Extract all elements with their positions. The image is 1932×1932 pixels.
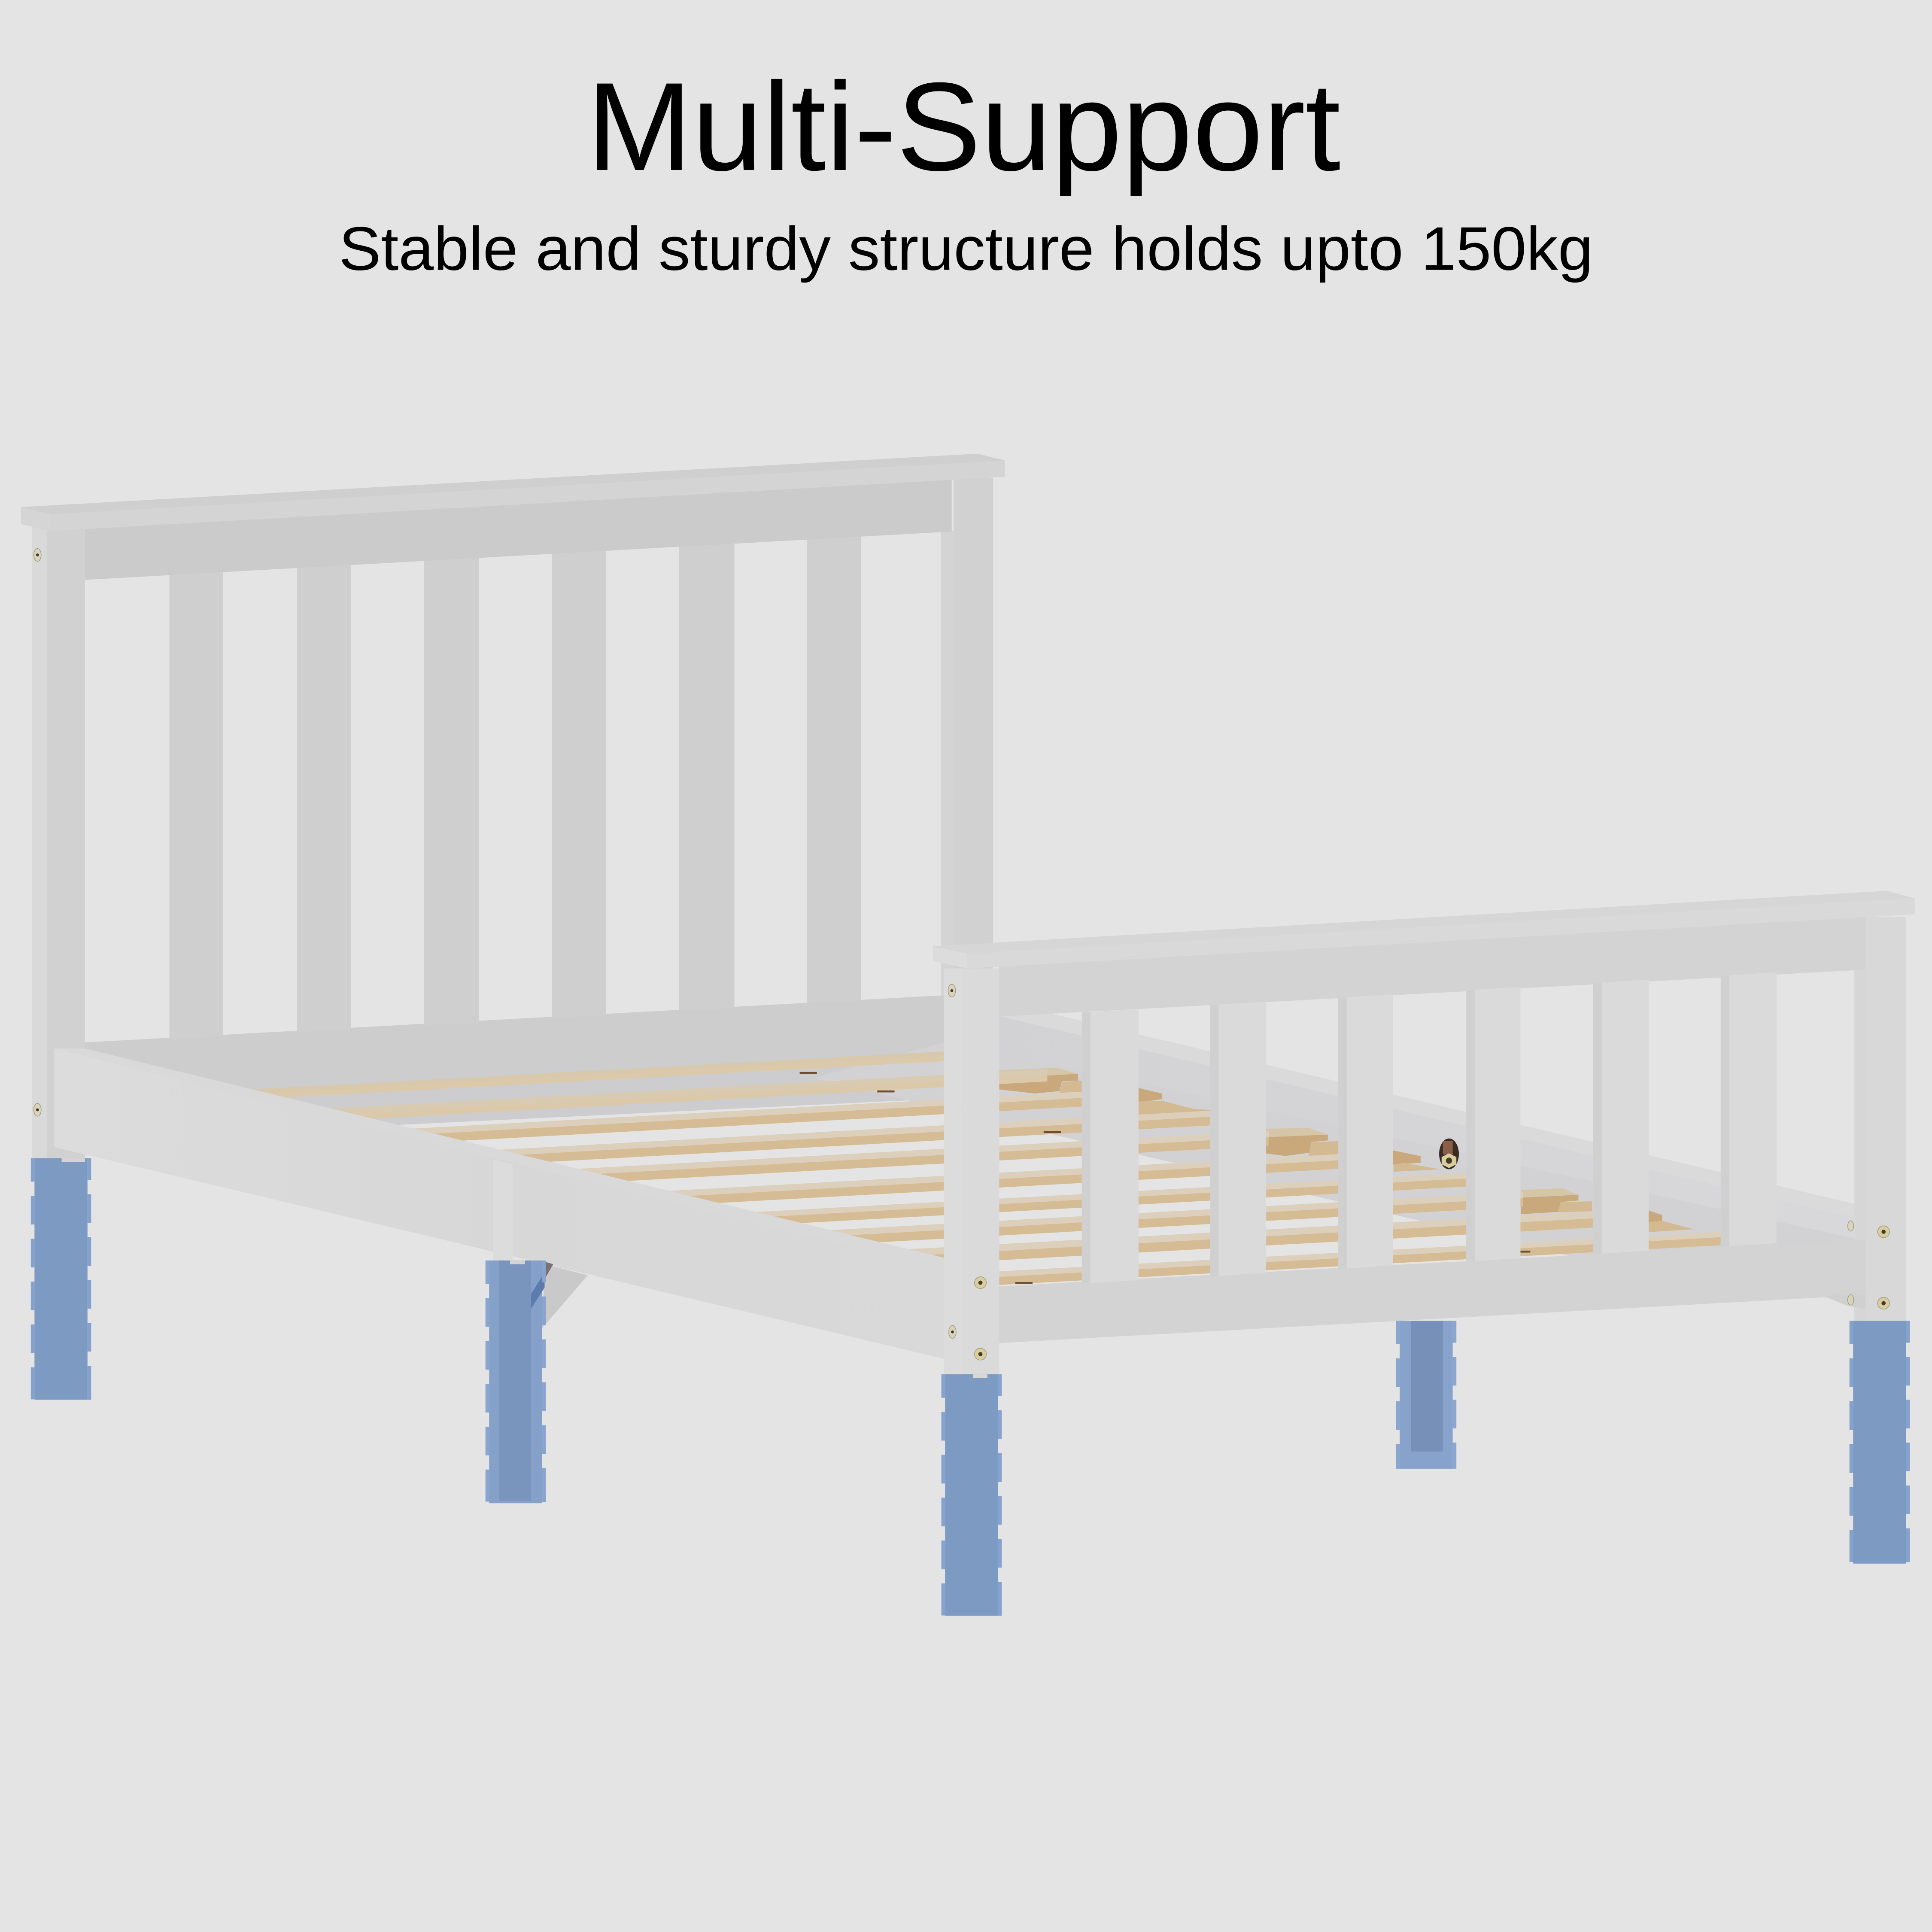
footboard vertical slats: [1082, 972, 1777, 1284]
leg: front left foot: [942, 1374, 1002, 1616]
far foot centre leg: [1396, 1321, 1456, 1469]
leg: centre near side: [486, 1261, 546, 1503]
slat 7: [721, 1173, 1475, 1227]
slat 8: [793, 1192, 1523, 1247]
headboard lower rail: [85, 996, 949, 1109]
slat 10: [960, 1232, 1721, 1287]
footboard left post: [944, 969, 999, 1375]
assembly screws: [34, 549, 1889, 1360]
slat 3: [386, 1089, 1129, 1145]
near side rail: [54, 1048, 945, 1359]
headboard: [21, 454, 1005, 1158]
bed illustration: [21, 454, 1915, 1616]
leg: back left: [31, 1158, 91, 1400]
headboard left post: [32, 522, 85, 1158]
leg: right foot: [1850, 1321, 1910, 1564]
headboard top rail: [85, 478, 952, 580]
subtitle: Stable and sturdy structure holds upto 150kg: [339, 215, 1593, 283]
foot slat 2: [1210, 1002, 1266, 1276]
footboard: [933, 891, 1915, 1375]
slat 2: [304, 1069, 1047, 1122]
foot slat 5: [1593, 980, 1649, 1255]
highlighted support legs: [31, 1158, 1910, 1616]
slat fixing marks: [800, 1072, 1530, 1284]
front screw heads: [975, 1226, 1889, 1360]
foot slat 3: [1338, 994, 1393, 1269]
slat cleats: [998, 1068, 1694, 1232]
side screw heads: [34, 549, 1853, 1338]
footboard right post: [1854, 917, 1906, 1322]
slat 4: [471, 1109, 1235, 1166]
foot slat 1: [1082, 1009, 1139, 1284]
title: Multi-Support: [586, 57, 1341, 197]
headboard right post: [941, 478, 993, 1048]
screw sockets: [36, 553, 1886, 1356]
centre support beam and frame floor: [252, 1041, 1854, 1293]
slat 6: [636, 1151, 1388, 1207]
footboard top cap: [933, 891, 1915, 969]
far side rail: [949, 990, 1854, 1269]
foot slat 6: [1721, 972, 1777, 1247]
icon: bolt seen through the footboard: [1439, 1139, 1459, 1170]
footboard upper rail: [999, 915, 1865, 1017]
slat 9: [871, 1209, 1629, 1267]
slat 1: [228, 1050, 969, 1100]
centre brace under the rail: [542, 1262, 588, 1328]
slat 5: [547, 1131, 1269, 1185]
headboard top cap: [21, 454, 1005, 531]
headboard vertical slats: [170, 534, 861, 1039]
wooden bed slats: [228, 1050, 1721, 1287]
foot slat 4: [1466, 987, 1520, 1262]
footboard lower rail: [999, 1239, 1865, 1343]
